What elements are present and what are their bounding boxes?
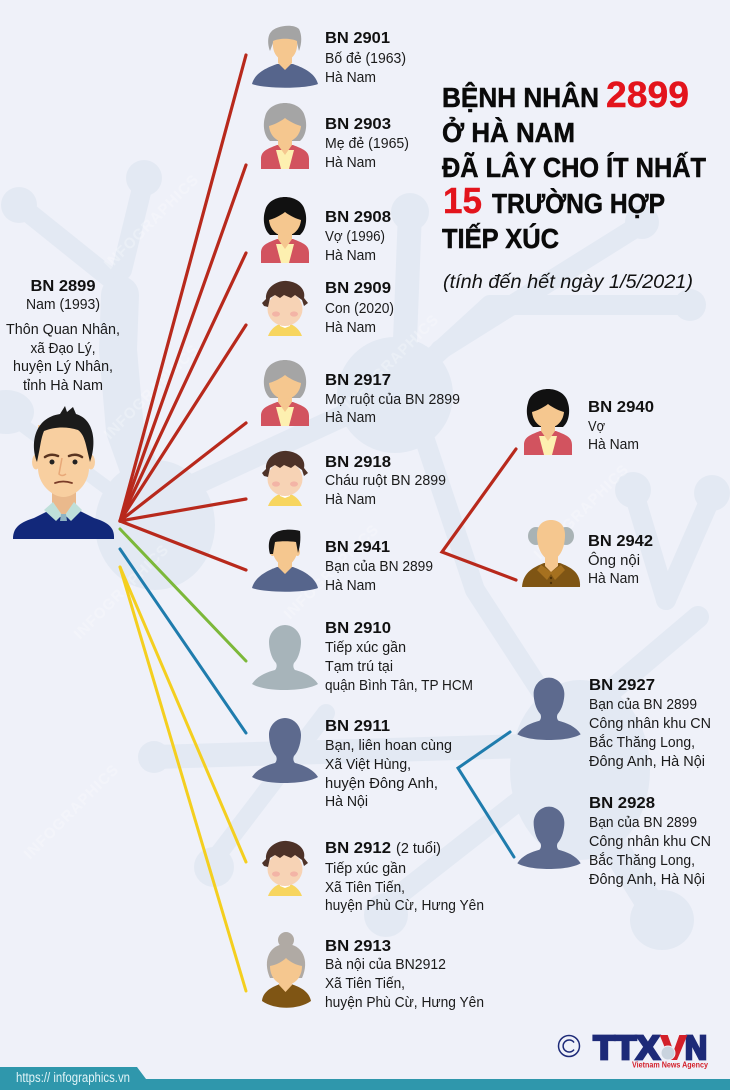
title: [442, 74, 706, 254]
title: BỆNH NHÂN: [442, 82, 599, 113]
contact: BN 2940: Hà Nam: [588, 437, 639, 453]
contact: BN 2940: Vợ: [588, 419, 605, 435]
index patient text: Thôn Quan Nhân,: [6, 322, 120, 338]
contact: BN 2942: Hà Nam: [588, 571, 639, 587]
contact: BN 2913: huyện Phù Cừ, Hưng Yên: [325, 995, 484, 1011]
title: Ở HÀ NAM: [442, 116, 575, 148]
contact: BN 2911: Hà Nội: [325, 794, 368, 810]
contact: BN 2928: Đông Anh, Hà Nội: [589, 872, 705, 888]
TTXVN logo: N: [685, 1029, 707, 1066]
contact: BN 2909: BN 2909: [325, 280, 391, 297]
contact: BN 2942: [522, 520, 653, 587]
watermark text: INFOGRAPHICS: [341, 311, 443, 413]
contact: BN 2927: Công nhân khu CN: [589, 716, 711, 732]
watermark text: INFOGRAPHICS: [531, 461, 633, 563]
contact: BN 2911: Bạn, liên hoan cùng: [325, 738, 452, 754]
index patient text: [6, 278, 120, 394]
watermark text: [21, 171, 633, 863]
index patient text: huyện Lý Nhân,: [13, 359, 113, 375]
contact: BN 2903: Mẹ đẻ (1965): [325, 136, 409, 152]
contact: BN 2940: BN 2940: [588, 399, 654, 416]
contact: BN 2908: Vợ (1996): [325, 229, 385, 245]
contact: BN 2941: [252, 530, 433, 594]
contact: BN 2911: Xã Việt Hùng,: [325, 757, 411, 773]
contact: BN 2941: Bạn của BN 2899: [325, 559, 433, 575]
contact: BN 2927: Bắc Thăng Long,: [589, 734, 695, 751]
contact: BN 2918: Cháu ruột BN 2899: [325, 473, 446, 489]
contact: BN 2909: Hà Nam: [325, 320, 376, 336]
contact: BN 2913: Bà nội của BN2912: [325, 957, 446, 973]
index patient text: Nam (1993): [26, 297, 100, 313]
title: 15: [443, 180, 482, 221]
title: 2899: [606, 74, 689, 115]
contact: BN 2910: quận Bình Tân, TP HCM: [325, 678, 473, 694]
copyright symbol: [558, 1036, 580, 1056]
blue connector line: [120, 549, 246, 733]
contact: BN 2912: BN 2912: [325, 840, 391, 857]
contact: BN 2928: Công nhân khu CN: [589, 834, 711, 850]
contact: BN 2910: Tiếp xúc gần: [325, 640, 406, 656]
TTXVN logo: TTX: [594, 1029, 660, 1066]
contact: BN 2910: [252, 620, 473, 694]
contact: BN 2910: Tạm trú tại: [325, 659, 393, 675]
contact: BN 2928: Bắc Thăng Long,: [589, 852, 695, 869]
contact: BN 2912: huyện Phù Cừ, Hưng Yên: [325, 898, 484, 914]
contact: BN 2927: BN 2927: [589, 677, 655, 694]
index patient text: tỉnh Hà Nam: [23, 378, 103, 394]
watermark text: INFOGRAPHICS: [71, 541, 173, 643]
contact: BN 2912: (2 tuổi): [396, 841, 441, 857]
contact: BN 2901: Bố đẻ (1963): [325, 51, 406, 67]
contact: BN 2917: BN 2917: [325, 372, 391, 389]
watermark text: INFOGRAPHICS: [21, 761, 123, 863]
contact: BN 2941: BN 2941: [325, 539, 390, 556]
contact: BN 2911: [252, 718, 452, 810]
contact: BN 2911: BN 2911: [325, 718, 390, 735]
blue secondary connector: [458, 732, 514, 857]
contact: BN 2913: Xã Tiên Tiến,: [325, 976, 405, 992]
contact: BN 2909: Con (2020): [325, 301, 394, 317]
icon: index patient portrait: [13, 406, 114, 539]
contact: BN 2917: Mợ ruột của BN 2899: [325, 392, 460, 408]
footer band: [0, 1067, 730, 1090]
contact: BN 2918: BN 2918: [325, 454, 391, 471]
contact: BN 2940: [524, 389, 654, 455]
TTXVN logo: Vietnam News Agency: [632, 1060, 708, 1070]
TTXVN logo: V: [661, 1029, 686, 1066]
contact: BN 2903: [261, 103, 409, 171]
contact: BN 2917: [261, 360, 460, 426]
contact: BN 2942: BN 2942: [588, 533, 653, 550]
contact: BN 2927: Bạn của BN 2899: [589, 697, 697, 713]
contact: BN 2901: Hà Nam: [325, 70, 376, 86]
title: TIẾP XÚC: [442, 223, 559, 254]
contact: BN 2901: [252, 26, 406, 88]
watermark text: INFOGRAPHICS: [101, 171, 203, 273]
contact: BN 2901: BN 2901: [325, 30, 390, 47]
index patient text: xã Đạo Lý,: [30, 341, 96, 357]
contact: BN 2941: Hà Nam: [325, 578, 376, 594]
green connector line: [120, 529, 246, 661]
contact: BN 2927: Đông Anh, Hà Nội: [589, 754, 705, 770]
contact: BN 2928: [517, 795, 711, 888]
background virus pattern: [0, 160, 730, 950]
yellow connector lines: [120, 567, 246, 991]
contact: BN 2912: Xã Tiên Tiến,: [325, 880, 405, 896]
subtitle date: (tính đến hết ngày 1/5/2021): [443, 272, 693, 293]
red secondary connector: [442, 449, 516, 580]
contact: BN 2908: BN 2908: [325, 209, 391, 226]
contact: BN 2911: huyện Đông Anh,: [325, 776, 438, 792]
contact: BN 2903: BN 2903: [325, 116, 391, 133]
footer url: https:// infographics.vn: [16, 1070, 130, 1085]
contact: BN 2910: BN 2910: [325, 620, 391, 637]
contact: BN 2928: Bạn của BN 2899: [589, 815, 697, 831]
contact: BN 2928: BN 2928: [589, 795, 655, 812]
title: TRƯỜNG HỢP: [492, 188, 665, 219]
contact: BN 2912: [262, 840, 484, 914]
contact: BN 2913: BN 2913: [325, 938, 391, 955]
contact: BN 2942: Ông nội: [588, 552, 640, 569]
watermark text: INFOGRAPHICS: [281, 521, 383, 623]
watermark text: INFOGRAPHICS: [101, 341, 203, 443]
red connector lines to contacts: [120, 55, 246, 570]
contact: BN 2903: Hà Nam: [325, 155, 376, 171]
contact: BN 2908: [261, 197, 391, 264]
index patient text: BN 2899: [30, 278, 96, 295]
contact: BN 2917: Hà Nam: [325, 410, 376, 426]
contact: BN 2927: [517, 677, 711, 770]
contact: BN 2908: Hà Nam: [325, 248, 376, 264]
contact: BN 2913: [262, 932, 484, 1011]
contact: BN 2912: Tiếp xúc gần: [325, 861, 406, 877]
title: ĐÃ LÂY CHO ÍT NHẤT: [442, 152, 706, 183]
TTXVN logo: [594, 1029, 708, 1070]
contact: BN 2918: Hà Nam: [325, 492, 376, 508]
contact: BN 2909: [262, 280, 394, 336]
contact: BN 2918: [262, 451, 446, 508]
